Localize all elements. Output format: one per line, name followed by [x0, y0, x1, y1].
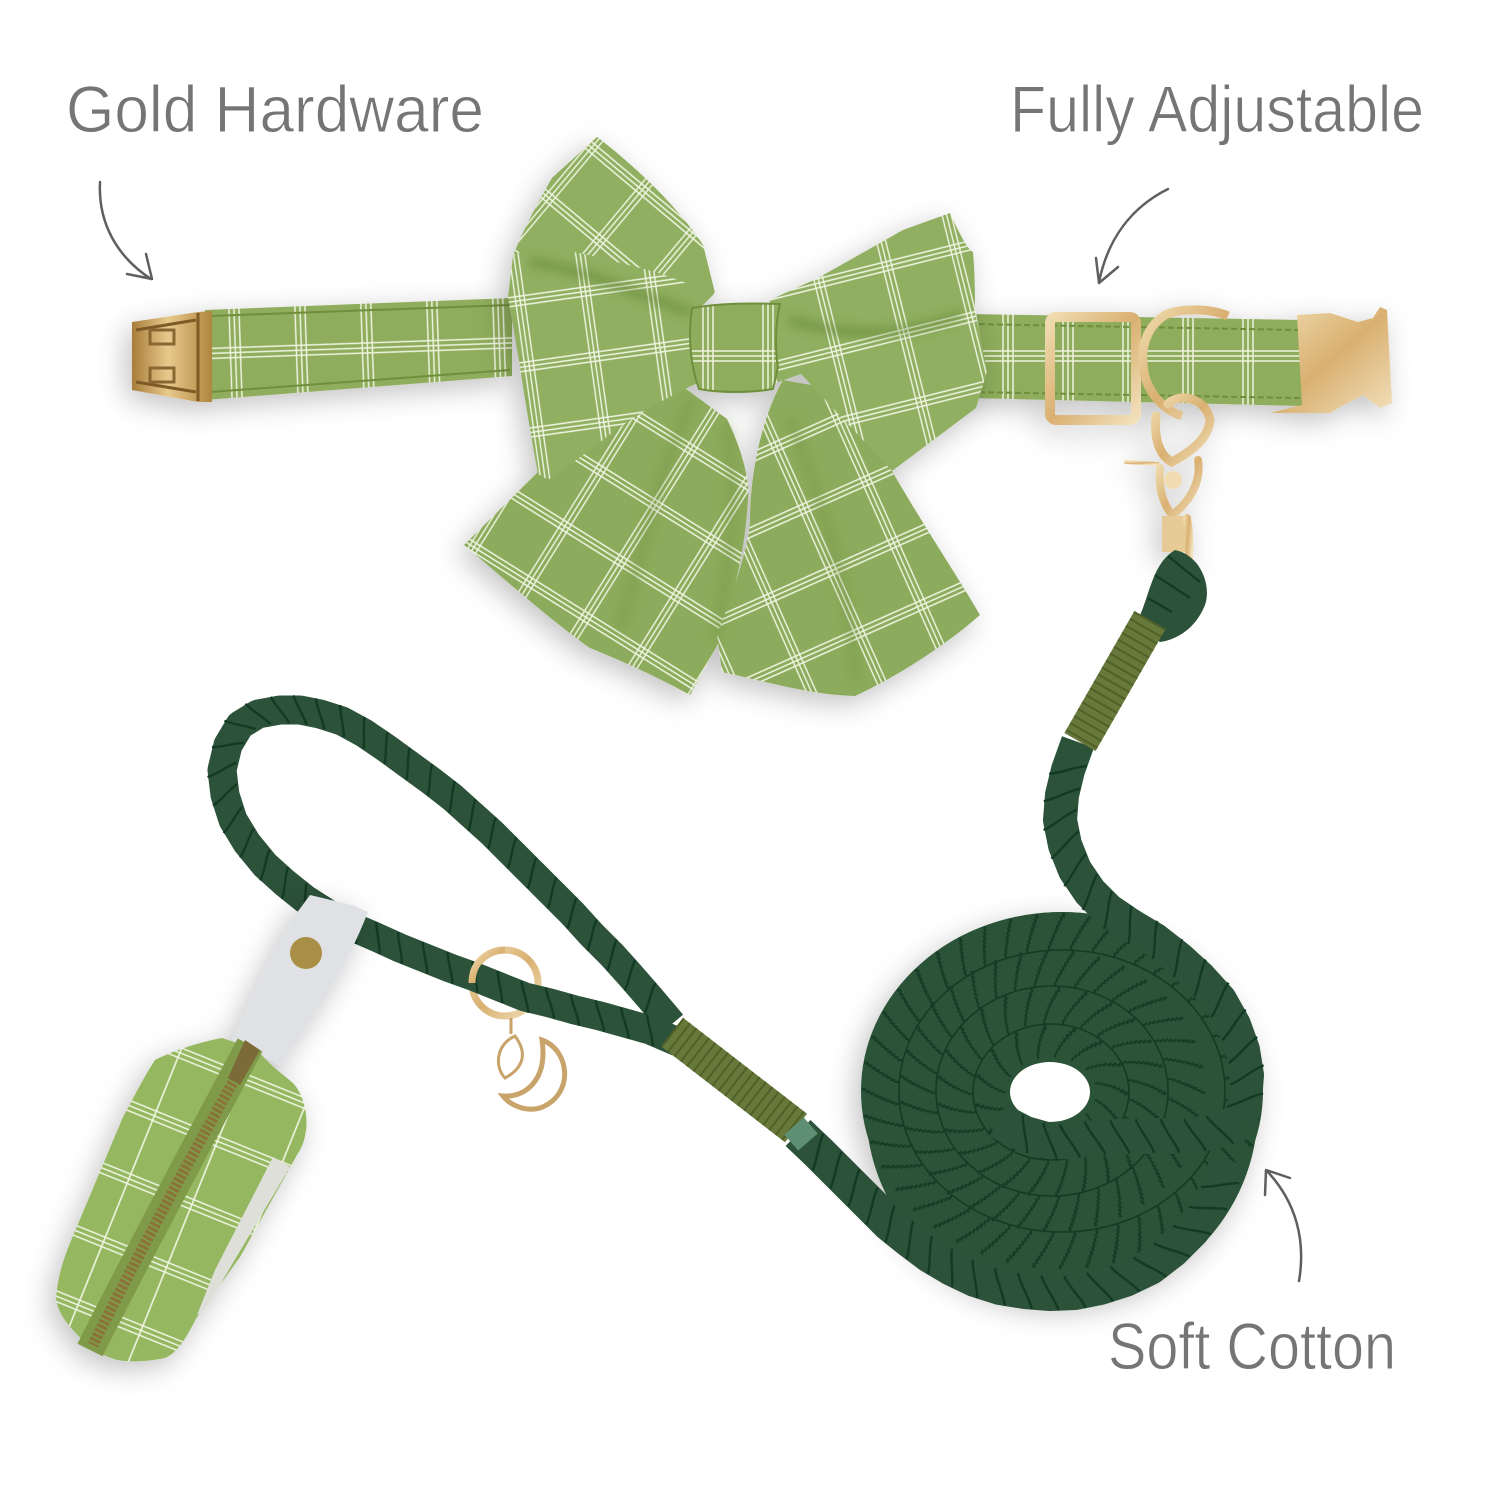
rope leash: [222, 550, 1260, 1304]
coil ring 1: [976, 1027, 1126, 1157]
arrow: fully adjustable: [1096, 189, 1168, 283]
bow crease shading: [530, 262, 960, 332]
pouch body: [56, 1038, 306, 1361]
zipper teeth: [93, 1070, 240, 1345]
coil centre hole: [1010, 1062, 1090, 1122]
gold slider: [1050, 317, 1136, 420]
heading: Gold Hardware: Gold Hardware: [66, 72, 484, 146]
collar: [132, 298, 1392, 584]
collar strap left: [205, 298, 512, 400]
gold swivel clasp: [1126, 398, 1210, 584]
rope top knot: [1135, 550, 1207, 642]
sailor bow: [464, 137, 987, 696]
gold buckle right: [1270, 307, 1392, 413]
rope run into coil bottom: [798, 1133, 1228, 1293]
bow wing left: [508, 137, 715, 480]
heading: Fully Adjustable: Fully Adjustable: [1010, 72, 1424, 146]
gold D ring: [1143, 310, 1228, 416]
collar strap right: [970, 314, 1302, 406]
heading: Soft Cotton: Soft Cotton: [1108, 1309, 1396, 1383]
zipper pull: [228, 1040, 260, 1085]
rope coil overlapping strand: [998, 1120, 1240, 1141]
pouch label: [197, 1157, 290, 1315]
coil ring 4: [864, 915, 1260, 1267]
arrow: soft cotton: [1265, 1170, 1301, 1281]
coil ring 2: [938, 989, 1164, 1195]
bow wing left upper flap: [513, 137, 715, 293]
rope run from top into coil: [1060, 742, 1247, 1125]
waste bag pouch: [56, 895, 368, 1361]
gold ring front arc: [472, 950, 505, 983]
bow knot: [690, 303, 780, 392]
moon charm: [498, 1018, 565, 1109]
coil ring 3: [901, 952, 1203, 1230]
olive whipping sleeve upper: [1080, 620, 1150, 742]
bow tail left: [464, 386, 748, 695]
arrow: gold hardware: [100, 182, 152, 279]
gold ring: [472, 950, 538, 1016]
leather loop: [232, 895, 368, 1066]
rope coil: [864, 912, 1260, 1304]
zipper tape: [90, 1045, 250, 1350]
bow tail folds: [620, 400, 856, 680]
rope handle loop: [222, 710, 678, 1042]
olive whipping sleeve lower: [672, 1032, 808, 1142]
bow tail right: [717, 380, 980, 696]
snap rivet: [290, 937, 322, 969]
bow wing right: [770, 213, 987, 471]
gold buckle left: [132, 311, 212, 402]
